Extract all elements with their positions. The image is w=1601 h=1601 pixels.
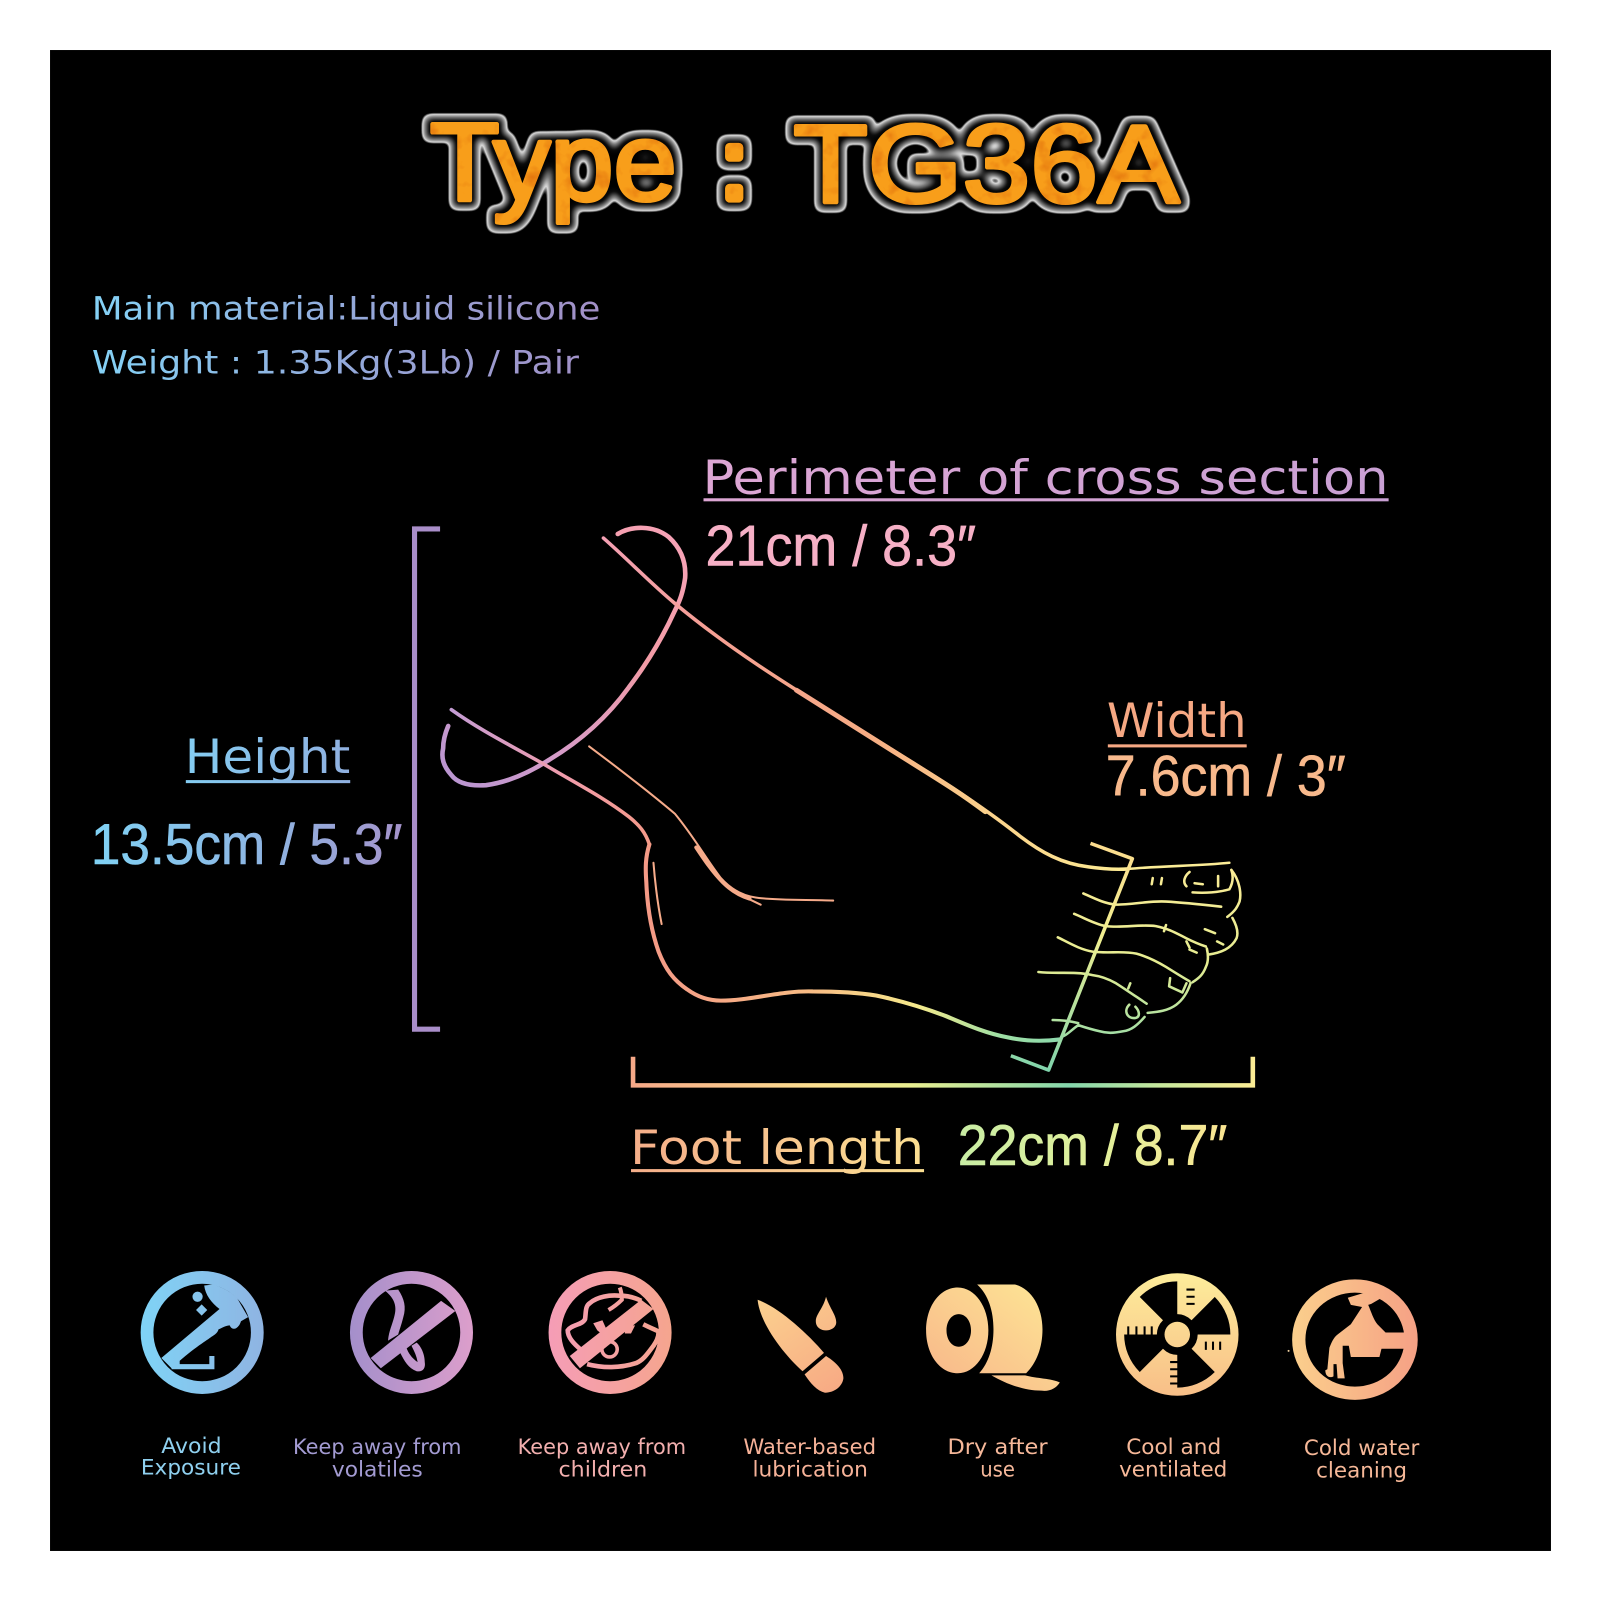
- thick part of achilles line: [696, 847, 749, 899]
- text block: material and weight: Main material:Liquid silicone: [92, 292, 600, 328]
- caption: water-based lubrication: Water-based: [743, 1435, 876, 1460]
- caption: cool and ventilated: Cool and: [1126, 1435, 1221, 1460]
- label: foot length: [630, 1114, 1227, 1178]
- icon: cold water cleaning: [1288, 1286, 1411, 1393]
- title: [430, 101, 1180, 226]
- label: height: Height: [185, 730, 350, 785]
- bracket: width: [1011, 843, 1132, 1070]
- label: width: 7.6cm / 3″: [1106, 744, 1346, 808]
- icon: keep away from volatiles: [356, 1277, 467, 1388]
- label: perimeter of cross section: 21cm / 8.3″: [706, 515, 976, 579]
- label: perimeter of cross section: [702, 451, 1389, 579]
- back of leg line: [451, 710, 649, 844]
- label: perimeter of cross section: Perimeter of cross section: [702, 451, 1389, 506]
- caption: dry after use: Dry after: [948, 1435, 1048, 1460]
- text block: material and weight: Weight : 1.35Kg(3Lb) / Pair: [92, 346, 580, 382]
- icon: cool and ventilated: [1119, 1276, 1235, 1393]
- caption: dry after use: use: [980, 1457, 1015, 1482]
- caption: dry after use: [948, 1435, 1048, 1482]
- caption: cold water cleaning: cleaning: [1316, 1458, 1407, 1483]
- caption: keep away from volatiles: volatiles: [332, 1457, 423, 1482]
- label: width: Width: [1107, 694, 1247, 749]
- label: foot length: Foot length: [630, 1121, 924, 1176]
- text block: material and weight: [92, 292, 600, 382]
- caption: keep away from children: Keep away from: [518, 1435, 686, 1460]
- caption: avoid exposure: Avoid: [161, 1434, 222, 1459]
- caption: keep away from children: children: [559, 1457, 647, 1482]
- caption: cold water cleaning: Cold water: [1304, 1436, 1419, 1461]
- caption: keep away from volatiles: Keep away from: [293, 1435, 462, 1460]
- caption: avoid exposure: Exposure: [141, 1455, 241, 1480]
- achilles line: [589, 746, 833, 924]
- foot drawing: [442, 528, 1240, 1070]
- label: height: 13.5cm / 5.3″: [91, 813, 402, 877]
- caption: avoid exposure: [141, 1434, 241, 1480]
- title: :: [721, 112, 748, 219]
- caption: keep away from children: [518, 1435, 686, 1482]
- title: Type: [430, 101, 677, 224]
- bracket: height: [415, 529, 440, 1029]
- caption: cool and ventilated: [1119, 1435, 1227, 1482]
- icon: water-based lubrication: [758, 1297, 843, 1393]
- icon: avoid exposure: [147, 1277, 257, 1388]
- caption: cold water cleaning: [1304, 1436, 1419, 1483]
- top of foot line: [603, 538, 1128, 869]
- bracket: foot length: [633, 1057, 1253, 1085]
- caption: cool and ventilated: ventilated: [1119, 1457, 1227, 1482]
- title: TG36A: [793, 103, 1180, 226]
- label: width: [1106, 694, 1346, 808]
- caption: water-based lubrication: lubrication: [753, 1457, 868, 1482]
- heel and sole line: [646, 844, 1060, 1041]
- label: foot length: 22cm / 8.7″: [958, 1114, 1227, 1178]
- label: height: [91, 730, 402, 877]
- icon: dry after use: [926, 1284, 1060, 1391]
- toes: [1038, 863, 1240, 1036]
- icon: keep away from children: [555, 1277, 665, 1388]
- caption: water-based lubrication: [743, 1435, 876, 1482]
- ankle cross-section loop: [442, 528, 685, 785]
- thick part of top line: [796, 690, 985, 812]
- caption: keep away from volatiles: [293, 1435, 462, 1482]
